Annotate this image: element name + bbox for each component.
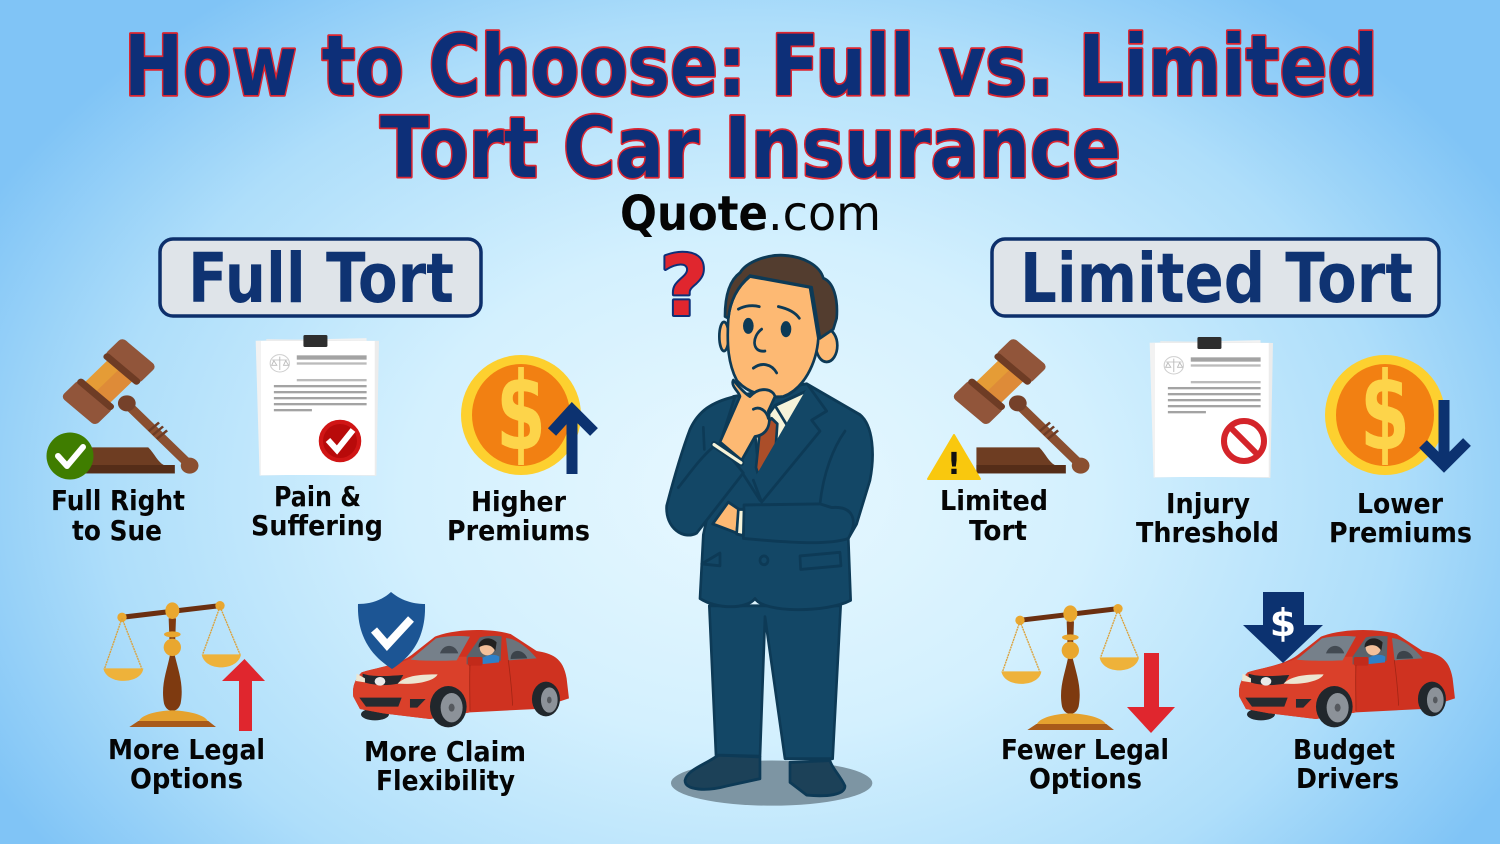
item: More Claim Flexibility: Flexibility xyxy=(376,765,515,797)
logo: Quote.com: Quote xyxy=(620,186,768,242)
item: Higher Premiums xyxy=(447,350,594,547)
item: Lower Premiums xyxy=(1325,350,1472,549)
logo: Quote.com: .com xyxy=(768,186,881,242)
figure: thinking man xyxy=(667,255,873,806)
item: Injury Threshold xyxy=(1136,337,1279,549)
item: Pain & Suffering xyxy=(251,335,383,542)
item: Lower Premiums: $ xyxy=(1360,350,1410,475)
item: More Claim Flexibility xyxy=(353,592,569,797)
logo: Quote.com xyxy=(620,186,881,242)
item: Pain & Suffering: Suffering xyxy=(251,510,383,542)
item: Lower Premiums: Premiums xyxy=(1329,517,1472,549)
item: Full Right to Sue: to Sue xyxy=(72,515,162,547)
item: Limited Tort: Limited xyxy=(940,485,1048,517)
item: More Legal Options: Options xyxy=(130,763,243,795)
item: Fewer Legal Options xyxy=(1001,604,1175,795)
item: More Legal Options: More Legal xyxy=(108,734,265,766)
item: Full Right to Sue xyxy=(46,337,198,547)
item: More Legal Options xyxy=(103,601,265,795)
question mark: ? xyxy=(660,237,708,335)
item: Higher Premiums: Higher xyxy=(471,486,566,518)
title xyxy=(124,17,1378,197)
item: Injury Threshold: Injury xyxy=(1166,488,1250,520)
item: Pain & Suffering: Pain & xyxy=(274,481,361,513)
heading: Limited Tort: Limited Tort xyxy=(1020,239,1413,319)
title: Tort Car Insurance xyxy=(380,99,1121,197)
item: Higher Premiums: $ xyxy=(496,350,546,475)
item: Higher Premiums: Premiums xyxy=(447,515,590,547)
item: Fewer Legal Options: Fewer Legal xyxy=(1001,734,1169,766)
item: Budget Drivers: Drivers xyxy=(1296,763,1399,795)
item: Budget Drivers: $ xyxy=(1270,601,1296,645)
item: Fewer Legal Options: Options xyxy=(1029,763,1142,795)
heading: Full Tort: Full Tort xyxy=(188,239,454,319)
item: Limited Tort xyxy=(928,337,1089,547)
item: Lower Premiums: Lower xyxy=(1357,488,1443,520)
item: Budget Drivers xyxy=(1239,592,1455,795)
item: Budget Drivers: Budget xyxy=(1293,734,1395,766)
item: Injury Threshold: Threshold xyxy=(1136,517,1279,549)
item: Full Right to Sue: Full Right xyxy=(51,485,185,517)
item: More Claim Flexibility: More Claim xyxy=(364,736,526,768)
item: Limited Tort: Tort xyxy=(969,515,1027,547)
item: Limited Tort: ! xyxy=(947,447,961,482)
